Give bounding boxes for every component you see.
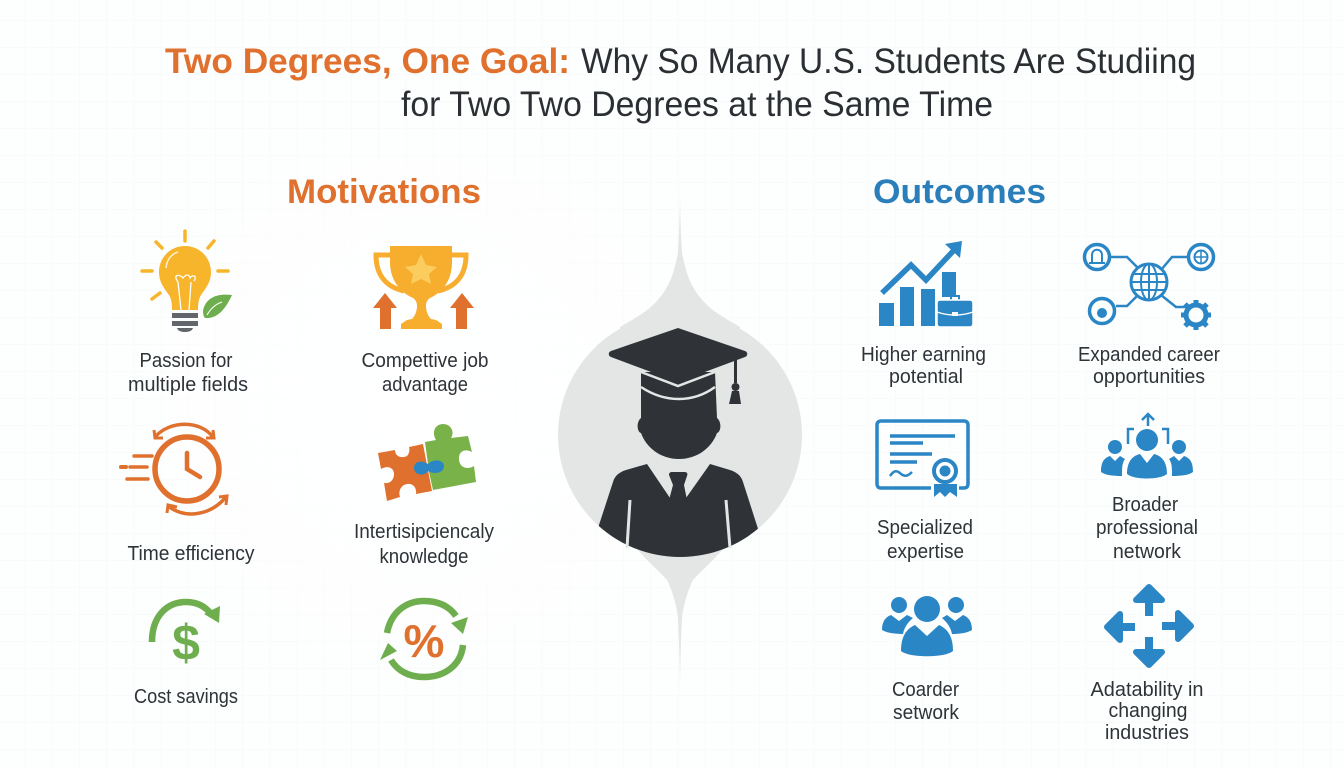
label: higher earning xyxy=(861,344,986,388)
label: adaptability: industries xyxy=(1105,722,1189,744)
icon: growth chart with briefcase xyxy=(879,241,973,327)
label: broader: Broader xyxy=(1112,494,1178,516)
label: passion xyxy=(128,350,248,396)
icon: certificate xyxy=(877,421,968,497)
panel: motivations xyxy=(121,173,494,708)
icon: dollar with arrow: $ xyxy=(172,615,200,671)
label: adaptability: changing xyxy=(1108,700,1188,722)
label: coarder network: setwork xyxy=(893,702,960,724)
icon: dollar with arrow xyxy=(152,602,220,671)
title: Why So Many U.S. Students Are Studiing xyxy=(581,42,1196,81)
label: coarder network: Coarder xyxy=(892,679,959,701)
icon: trophy with arrows xyxy=(373,246,474,329)
label: specialized xyxy=(877,517,973,563)
label: broader: professional xyxy=(1096,517,1198,539)
icon: global network xyxy=(1084,244,1214,330)
label: higher earning: potential xyxy=(889,366,963,388)
icon: light bulb with leaf xyxy=(142,231,232,332)
label: higher earning: Higher earning xyxy=(861,344,986,366)
icon: clock with arrows xyxy=(121,424,227,514)
icon: people group xyxy=(882,596,972,656)
heading: outcomes: Outcomes xyxy=(873,173,1046,211)
label: passion: multiple fields xyxy=(128,374,248,396)
panel: outcomes xyxy=(861,173,1220,744)
label: expanded career: Expanded career xyxy=(1078,344,1220,366)
graduate silhouette xyxy=(598,328,758,557)
label: competitive xyxy=(362,350,488,396)
title: Two Degrees, One Goal: xyxy=(165,42,570,81)
teardrop backdrop xyxy=(620,185,740,700)
label: specialized: expertise xyxy=(887,541,964,563)
label: specialized: Specialized xyxy=(877,517,973,539)
label: coarder network xyxy=(892,679,960,724)
label: interdisciplinary: knowledge xyxy=(380,546,468,568)
icon: four-way arrows xyxy=(1107,587,1191,665)
label: expanded career xyxy=(1078,344,1220,388)
title: for Two Two Degrees at the Same Time xyxy=(401,85,993,124)
label: competitive: advantage xyxy=(382,374,468,396)
icon: puzzle pieces xyxy=(378,424,476,501)
icon: percent with cycle arrows xyxy=(380,601,468,677)
label: competitive: Compettive job xyxy=(362,350,488,372)
icon: professional network xyxy=(1101,414,1193,478)
title xyxy=(165,42,1196,124)
label: time efficiency: Time efficiency xyxy=(128,543,254,565)
heading: motivations: Motivations xyxy=(287,173,481,211)
label: adaptability: Adatability in xyxy=(1090,679,1204,701)
label: passion: Passion for xyxy=(140,350,233,372)
label: broader xyxy=(1096,494,1198,563)
label: cost savings: Cost savings xyxy=(134,686,238,708)
label: interdisciplinary: Intertisipciencaly xyxy=(354,521,494,543)
icon: percent with cycle arrows: % xyxy=(404,615,444,667)
label: adaptability xyxy=(1090,679,1204,744)
label: broader: network xyxy=(1113,541,1182,563)
label: interdisciplinary xyxy=(354,521,494,568)
label: expanded career: opportunities xyxy=(1093,366,1205,388)
central figure: graduate xyxy=(558,185,802,700)
